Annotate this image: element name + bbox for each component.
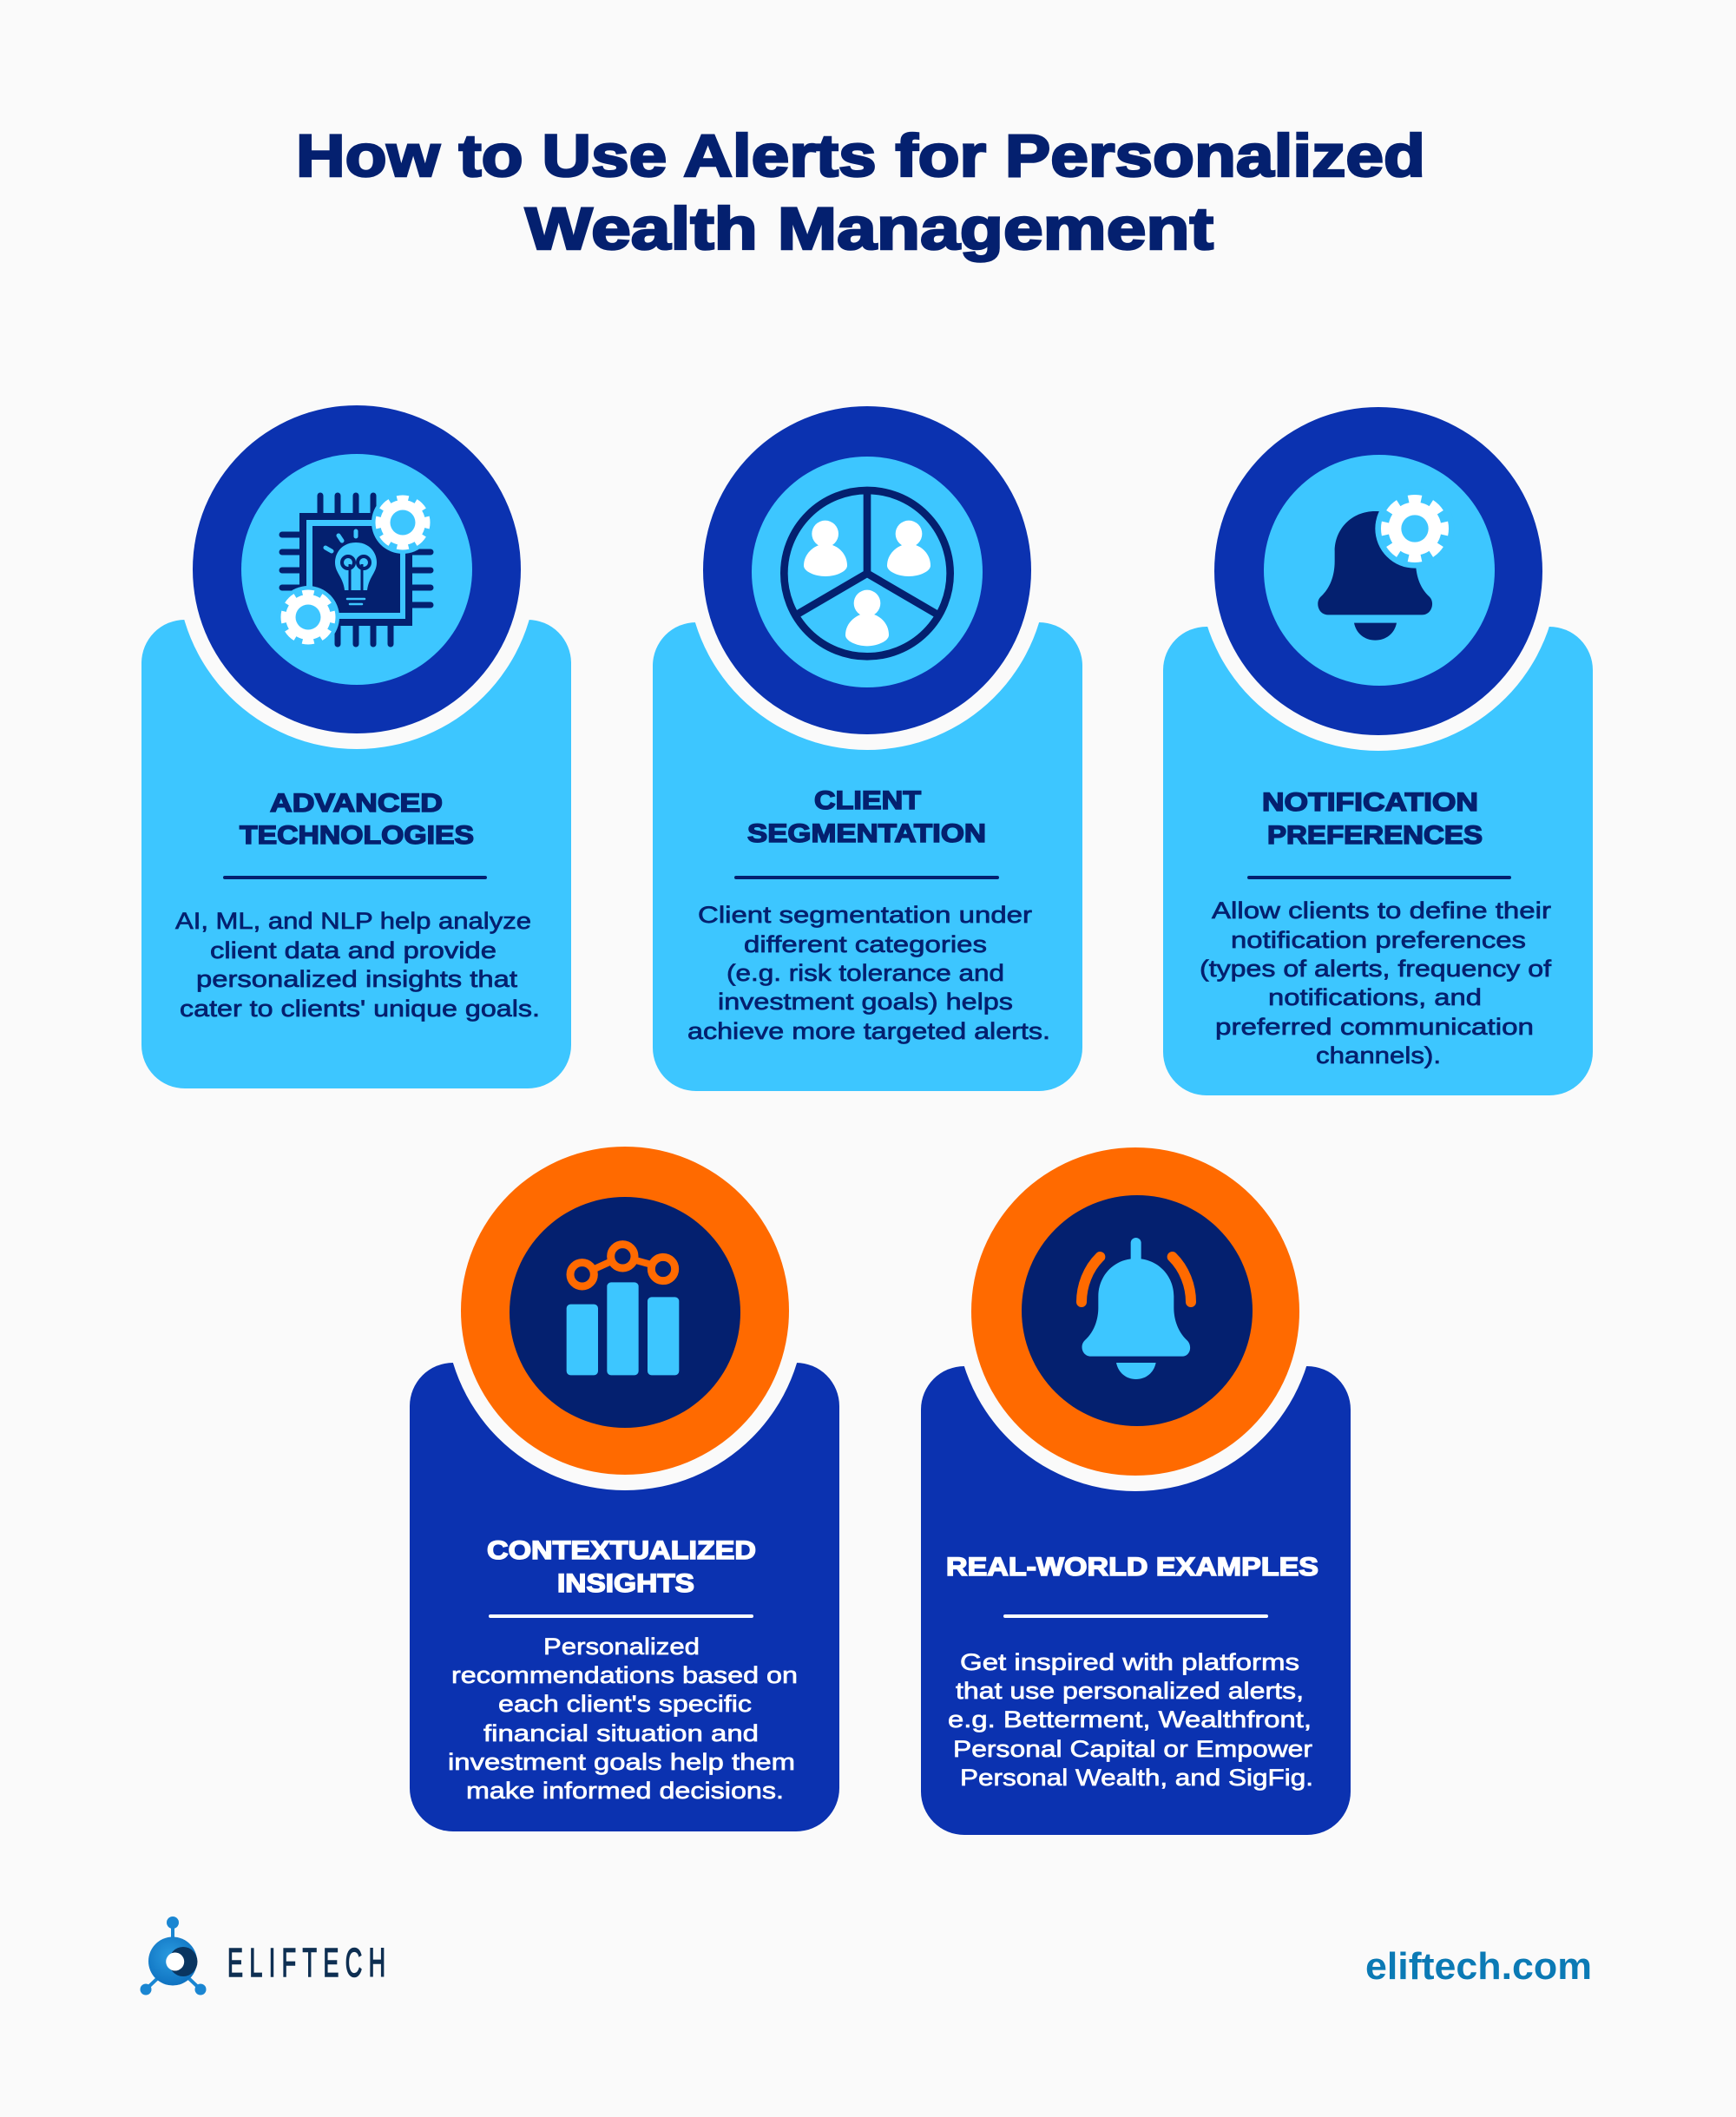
website url: eliftech.com bbox=[1365, 1945, 1592, 1988]
icon: bar chart with trend line bbox=[567, 1245, 679, 1375]
body text: Allow clients to define their bbox=[1212, 897, 1551, 924]
body text: investment goals help them bbox=[448, 1749, 795, 1775]
body text: channels). bbox=[1316, 1042, 1441, 1068]
icon: chip with lightbulb and gears bbox=[277, 491, 434, 648]
panel: notification preferences bbox=[1163, 391, 1593, 1095]
circle badge bbox=[687, 391, 1047, 750]
body text: Personal Wealth, and SigFig. bbox=[960, 1765, 1313, 1791]
heading: PREFERENCES bbox=[1267, 821, 1483, 850]
heading bbox=[1262, 788, 1483, 850]
body text bbox=[1200, 897, 1552, 1068]
panel: advanced technologies bbox=[141, 390, 571, 1088]
heading: INSIGHTS bbox=[557, 1569, 694, 1598]
body text: different categories bbox=[744, 931, 987, 957]
circle badge bbox=[177, 390, 536, 749]
title: Wealth Management bbox=[525, 195, 1213, 262]
card background bbox=[921, 1366, 1351, 1835]
title bbox=[296, 122, 1425, 262]
body text bbox=[948, 1649, 1313, 1791]
body text: recommendations based on bbox=[451, 1662, 798, 1688]
title: How to Use Alerts for Personalized bbox=[296, 122, 1425, 189]
body text bbox=[448, 1634, 798, 1804]
circle badge bbox=[1199, 391, 1558, 751]
body text: financial situation and bbox=[483, 1720, 759, 1746]
body text: Personal Capital or Empower bbox=[953, 1736, 1312, 1762]
heading: CLIENT bbox=[814, 786, 921, 815]
body text: AI, ML, and NLP help analyze bbox=[175, 908, 531, 934]
panel: contextualized insights bbox=[410, 1131, 839, 1831]
card background bbox=[410, 1363, 839, 1831]
body text: Client segmentation under bbox=[698, 902, 1032, 928]
logo mark bbox=[141, 1916, 207, 1995]
heading: ADVANCED bbox=[270, 789, 443, 818]
heading: NOTIFICATION bbox=[1262, 788, 1478, 817]
body text: preferred communication bbox=[1215, 1014, 1534, 1040]
body text: (types of alerts, frequency of bbox=[1200, 956, 1552, 982]
heading: REAL-WORLD EXAMPLES bbox=[946, 1553, 1318, 1581]
icon: ringing bell bbox=[1082, 1238, 1191, 1379]
panel: real-world examples bbox=[921, 1132, 1351, 1835]
body text: e.g. Betterment, Wealthfront, bbox=[948, 1706, 1312, 1732]
body text: notifications, and bbox=[1268, 984, 1482, 1010]
icon: segmented pie with three people bbox=[784, 490, 950, 656]
body text: that use personalized alerts, bbox=[956, 1678, 1304, 1704]
icon: bell with gear bbox=[1318, 489, 1455, 641]
body text: investment goals) helps bbox=[718, 989, 1013, 1015]
heading bbox=[240, 789, 474, 850]
body text bbox=[175, 908, 540, 1022]
heading bbox=[747, 786, 986, 848]
body text: (e.g. risk tolerance and bbox=[727, 960, 1004, 986]
card background bbox=[1163, 627, 1593, 1095]
circle badge bbox=[956, 1132, 1315, 1491]
body text: client data and provide bbox=[210, 937, 496, 963]
body text: Get inspired with platforms bbox=[960, 1649, 1299, 1675]
body text bbox=[687, 902, 1050, 1044]
body text: notification preferences bbox=[1231, 927, 1526, 953]
heading: CONTEXTUALIZED bbox=[487, 1536, 756, 1565]
panel: client segmentation bbox=[653, 391, 1082, 1091]
card background bbox=[653, 622, 1082, 1091]
heading: SEGMENTATION bbox=[747, 819, 986, 848]
body text: personalized insights that bbox=[196, 966, 518, 992]
heading bbox=[487, 1536, 756, 1598]
logo wordmark: ELIFTECH bbox=[227, 1942, 385, 1986]
body text: achieve more targeted alerts. bbox=[687, 1018, 1050, 1044]
circle badge bbox=[445, 1131, 805, 1490]
body text: make informed decisions. bbox=[466, 1778, 784, 1804]
body text: cater to clients' unique goals. bbox=[180, 996, 540, 1022]
card background bbox=[141, 620, 571, 1088]
heading: TECHNOLOGIES bbox=[240, 821, 474, 850]
body text: each client's specific bbox=[498, 1691, 752, 1717]
body text: Personalized bbox=[543, 1634, 700, 1660]
logo: ELIFTECH bbox=[141, 1916, 385, 1995]
